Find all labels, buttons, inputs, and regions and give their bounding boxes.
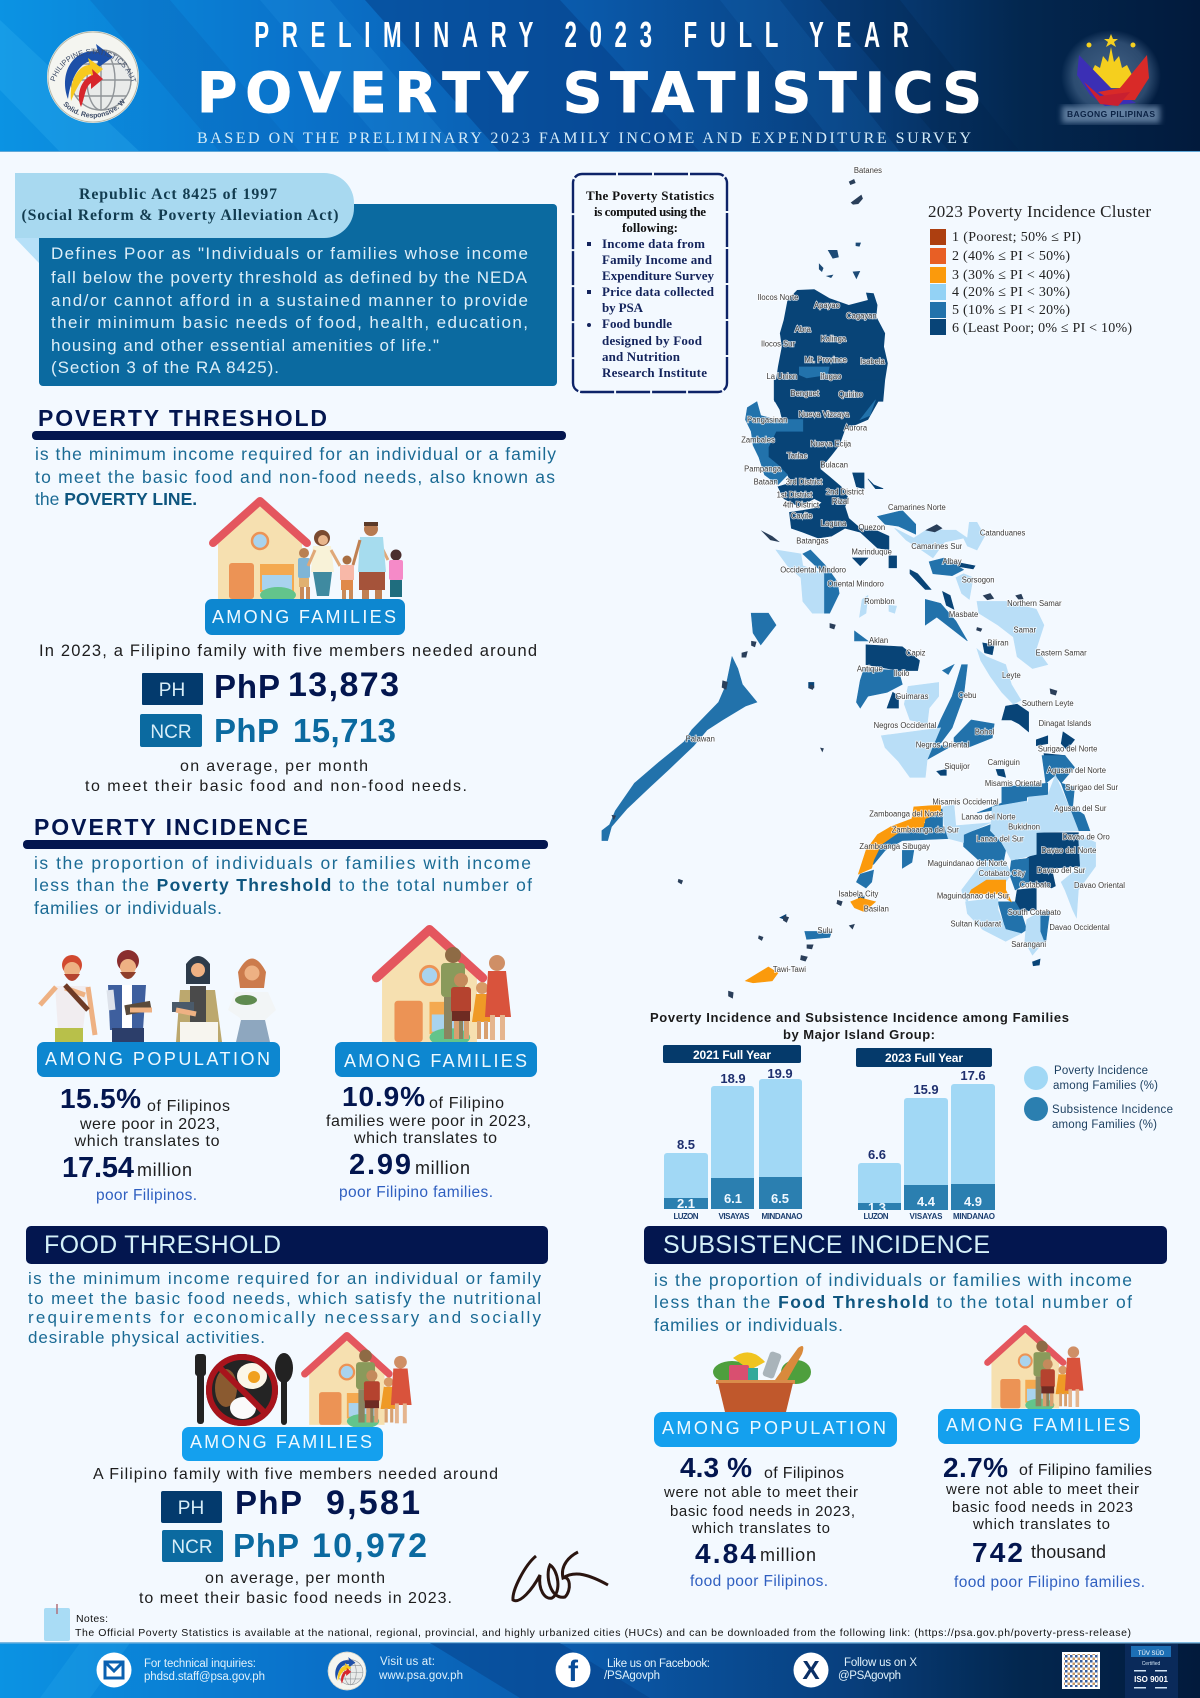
panel: poverty incidence: AMONG POPULATION bbox=[45, 1049, 270, 1069]
contact: facebook: /PSAgovph bbox=[604, 1670, 660, 1682]
chart: 2023 full year: 4.4 bbox=[917, 1194, 936, 1209]
icon: house and family bbox=[376, 930, 511, 1047]
province labels (lower): Ifugao bbox=[820, 372, 841, 381]
stat: families: families were poor in 2023, bbox=[326, 1113, 531, 1130]
chart: 2021 full year: MINDANAO bbox=[762, 1212, 802, 1221]
panel: subsistence incidence: AMONG POPULATION bbox=[662, 1418, 886, 1438]
province labels (lower): Maguindanao del Norte bbox=[928, 859, 1007, 868]
stat: families: million bbox=[415, 1158, 470, 1178]
stat: population: 15.5% bbox=[60, 1083, 141, 1114]
province labels (lower): Nueva Ecija bbox=[810, 439, 852, 448]
panel: subsistence incidence: SUBSISTENCE INCIDENCE bbox=[663, 1231, 990, 1259]
chart: 2021 full year: 18.9 bbox=[720, 1071, 746, 1086]
panel: poverty threshold: to meet their basic food and non-food needs. bbox=[85, 778, 467, 795]
province labels (lower): Batangas bbox=[796, 537, 829, 546]
province labels (lower): Kalinga bbox=[821, 335, 847, 344]
panel: data sources note: The Poverty Statistics bbox=[586, 188, 714, 203]
province labels (lower): Camarines Norte bbox=[888, 503, 946, 512]
stat: families: basic food needs in 2023 bbox=[952, 1499, 1133, 1516]
subtitle: BASED ON THE PRELIMINARY 2023 FAMILY INCOME AND EXPENDITURE SURVEY bbox=[197, 130, 971, 147]
figure: PH threshold bbox=[142, 666, 399, 705]
panel: Republic Act 8425: Republic Act 8425 of 1997 bbox=[79, 186, 277, 203]
panel: data sources note: Expenditure Survey bbox=[602, 268, 714, 283]
province labels (lower): Mt. Province bbox=[805, 355, 847, 365]
province labels (lower): Davao del Sur bbox=[1037, 866, 1086, 875]
chart: 2021 full year: VISAYAS bbox=[718, 1212, 750, 1221]
province labels (upper): Batanes bbox=[854, 166, 882, 175]
province labels (lower): Davao del Norte bbox=[1041, 846, 1096, 855]
province labels (lower): Misamis Occidental bbox=[932, 797, 999, 807]
stat: families bbox=[326, 1081, 531, 1201]
panel: data sources note: Family Income and bbox=[602, 252, 713, 267]
province labels (lower): Misamis Oriental bbox=[985, 779, 1042, 788]
logo: Bagong Pilipinas bbox=[1061, 30, 1161, 123]
figure: PH food threshold bbox=[161, 1484, 420, 1523]
province labels (lower): South Cotabato bbox=[1008, 908, 1061, 917]
definition: families or individuals. bbox=[654, 1315, 843, 1335]
province labels (lower): Aurora bbox=[844, 423, 868, 433]
panel: subsistence incidence bbox=[644, 1226, 1167, 1591]
figure: PH food threshold: PhP bbox=[235, 1484, 302, 1521]
chart: 2023 full year: LUZON bbox=[864, 1212, 889, 1221]
contact: facebook: Like us on Facebook: bbox=[607, 1658, 710, 1670]
province labels (lower): Apayao bbox=[814, 301, 840, 310]
province labels (lower): 3rd District bbox=[786, 478, 823, 487]
figure: NCR threshold: NCR bbox=[150, 722, 192, 743]
pill: among families bbox=[205, 599, 405, 635]
central and southern Philippines bbox=[602, 166, 1125, 999]
stat: families: of Filipino families bbox=[1019, 1462, 1152, 1479]
panel: food threshold: to meet their basic food needs in 2023. bbox=[139, 1590, 452, 1607]
legend: poverty incidence cluster: 4 (20% ≤ PI < 30%) bbox=[952, 285, 1070, 300]
province labels (lower): Capiz bbox=[906, 648, 926, 658]
contact: email: For technical inquiries: bbox=[144, 1658, 256, 1670]
stat: population: were poor in 2023, bbox=[79, 1116, 220, 1133]
stat: families: of Filipino bbox=[429, 1095, 504, 1112]
chart legend: Poverty Incidence bbox=[1054, 1065, 1148, 1077]
ISO badge: TÜV SÜD bbox=[1138, 1650, 1165, 1657]
heading bbox=[644, 1226, 1167, 1264]
legend: poverty incidence cluster: 5 (10% ≤ PI < 20%) bbox=[952, 303, 1070, 318]
figure: PH food threshold: 9,581 bbox=[326, 1484, 420, 1522]
province labels (lower): Siquijor bbox=[944, 762, 970, 771]
province labels (lower): Zamboanga del Sur bbox=[892, 826, 959, 835]
ISO badge: ISO 9001 bbox=[1134, 1675, 1168, 1684]
chart: 2021 full year: 2.1 bbox=[677, 1196, 695, 1211]
chart: 2021 full year: 6.5 bbox=[771, 1191, 789, 1206]
stat: population bbox=[60, 1083, 230, 1204]
contact: X bbox=[794, 1652, 917, 1688]
text: needed around: In 2023, a Filipino family with five members needed around bbox=[39, 642, 537, 660]
stat: population: food poor Filipinos. bbox=[690, 1573, 828, 1590]
province labels (lower): Bulacan bbox=[820, 461, 848, 470]
stat: population: which translates to bbox=[691, 1520, 830, 1537]
chart: poverty and subsistence incidence by major island group: by Major Island Group: bbox=[783, 1027, 935, 1042]
province labels (lower): Basilan bbox=[864, 904, 889, 913]
definition: less than the Poverty Threshold to the total number of bbox=[34, 875, 532, 895]
province labels (lower): Pangasinan bbox=[747, 415, 787, 424]
panel: data sources note: Price data collected bbox=[602, 284, 715, 299]
province labels (lower): Catanduanes bbox=[980, 529, 1025, 538]
contact: email bbox=[96, 1652, 265, 1688]
definition bbox=[654, 1270, 1132, 1335]
legend: poverty incidence cluster bbox=[928, 202, 1151, 336]
pill: among population bbox=[37, 1042, 280, 1077]
panel: subsistence incidence: AMONG FAMILIES bbox=[946, 1415, 1130, 1435]
panel: data sources note: by PSA bbox=[602, 300, 644, 315]
province labels (lower): Ilocos Sur bbox=[761, 339, 795, 348]
province labels (lower): Zamboanga del Norte bbox=[869, 809, 943, 818]
province labels (lower): Laguna bbox=[821, 519, 847, 528]
contact: website: Visit us at: bbox=[380, 1656, 435, 1668]
stat: population: million bbox=[137, 1160, 192, 1180]
province labels (lower): Benguet bbox=[791, 389, 820, 398]
legend: poverty incidence cluster: 6 (Least Poor; 0% ≤ PI < 10%) bbox=[952, 321, 1132, 336]
province labels (lower): Southern Leyte bbox=[1022, 699, 1074, 708]
definition: requirements for economically necessary and socially bbox=[28, 1308, 541, 1327]
province labels (lower): Sultan Kudarat bbox=[951, 919, 1002, 928]
definition: less than the Food Threshold to the total number of bbox=[654, 1292, 1132, 1312]
province labels (lower): Isabela City bbox=[838, 890, 878, 899]
text: needed around: A Filipino family with five members needed around bbox=[93, 1466, 498, 1483]
definition text: (Section 3 of the RA 8425). bbox=[51, 358, 279, 377]
province labels (lower): Davao de Oro bbox=[1062, 832, 1110, 841]
province labels (lower): Negros Occidental bbox=[874, 721, 937, 730]
province labels (lower): Lanao del Sur bbox=[976, 834, 1024, 843]
province labels (lower): Davao Oriental bbox=[1074, 881, 1125, 890]
heading: POVERTY INCIDENCE bbox=[34, 814, 308, 840]
province labels (lower): Bohol bbox=[975, 727, 995, 737]
province labels (lower): Bukidnon bbox=[1008, 822, 1040, 831]
province labels (lower): Palawan bbox=[686, 735, 715, 744]
definition text: and/or cannot afford in a sustained manner to provide bbox=[51, 291, 528, 310]
chart: 2023 full year: 17.6 bbox=[960, 1068, 986, 1083]
fold triangle bbox=[15, 238, 39, 263]
definition text: housing and other essential amenities of life." bbox=[51, 336, 439, 355]
province labels (lower): Antique bbox=[857, 664, 883, 673]
definition: is the proportion of individuals or families with income bbox=[654, 1270, 1132, 1290]
stat: population: were not able to meet their bbox=[663, 1484, 858, 1501]
province labels (lower): Aklan bbox=[869, 636, 888, 645]
province labels (lower): Abra bbox=[795, 325, 812, 334]
panel: Republic Act 8425: (Social Reform & Poverty Alleviation Act) bbox=[22, 207, 338, 224]
province labels (lower): Sarangani bbox=[1011, 940, 1046, 949]
text: per month: on average, per month bbox=[180, 758, 368, 775]
province labels (lower): Guimaras bbox=[895, 692, 929, 701]
province labels (lower): 1st District bbox=[777, 490, 813, 499]
stat: families: 10.9% bbox=[342, 1081, 425, 1112]
contact: facebook bbox=[556, 1652, 710, 1688]
province labels (lower): Cotabato City bbox=[979, 869, 1025, 878]
province labels (lower): Cagayan bbox=[846, 312, 877, 321]
province labels (lower): Leyte bbox=[1002, 671, 1021, 680]
province labels (lower): Agusan del Norte bbox=[1047, 766, 1106, 775]
stat: families: 742 bbox=[972, 1537, 1023, 1568]
chart: 2023 full year: 2023 Full Year bbox=[885, 1051, 963, 1065]
chart: 2023 full year: 6.6 bbox=[868, 1147, 886, 1162]
province labels (lower): Bataan bbox=[754, 477, 778, 486]
province labels (lower): Sulu bbox=[817, 926, 833, 935]
icon: note bbox=[44, 1604, 70, 1641]
stat: families: were not able to meet their bbox=[945, 1481, 1139, 1498]
ISO badge: Certified bbox=[1142, 1661, 1161, 1667]
logo: PSA bbox=[47, 31, 139, 123]
ISO badge bbox=[1125, 1644, 1178, 1698]
pill: among population bbox=[654, 1412, 897, 1447]
contact: X: X bbox=[802, 1655, 820, 1685]
figure: NCR food threshold: PhP bbox=[233, 1527, 299, 1564]
signature bbox=[513, 1552, 608, 1601]
contact: email: phdsd.staff@psa.gov.ph bbox=[144, 1671, 265, 1683]
figure: NCR threshold bbox=[140, 712, 396, 749]
footer banner bbox=[0, 1642, 1200, 1698]
chart: 2023 full year bbox=[856, 1048, 995, 1221]
figure: PH threshold: PhP bbox=[214, 668, 280, 705]
province labels (lower): Rizal bbox=[832, 497, 849, 506]
contact: X: Follow us on X bbox=[844, 1657, 917, 1669]
panel: data sources note: and Nutrition bbox=[602, 349, 681, 364]
province labels (lower): Masbate bbox=[949, 610, 978, 619]
chart legend: Subsistence Incidence bbox=[1052, 1104, 1173, 1116]
logo: PSA: Solid. Responsive. World-class bbox=[64, 98, 125, 120]
contact: website: www.psa.gov.ph bbox=[378, 1670, 463, 1682]
province labels (lower): Camarines Sur bbox=[911, 542, 963, 551]
panel: data sources note: Income data from bbox=[602, 236, 705, 251]
province labels (lower): Isabela bbox=[860, 357, 885, 366]
figure: NCR threshold: PhP bbox=[214, 712, 279, 749]
province labels (lower): Albay bbox=[943, 557, 962, 566]
figure: NCR food threshold bbox=[162, 1527, 427, 1565]
panel: poverty incidence: AMONG FAMILIES bbox=[344, 1051, 527, 1071]
panel: data sources note bbox=[573, 174, 727, 392]
chart: 2021 full year bbox=[663, 1045, 802, 1221]
stat: population: of Filipinos bbox=[147, 1098, 230, 1115]
chart: 2023 full year: MINDANAO bbox=[953, 1212, 995, 1221]
icon: four people eating bbox=[40, 950, 276, 1042]
legend: poverty incidence cluster: 3 (30% ≤ PI < 40%) bbox=[952, 268, 1070, 283]
province labels (lower): La Union bbox=[766, 372, 797, 381]
legend: poverty incidence cluster: 2023 Poverty Incidence Cluster bbox=[928, 202, 1151, 221]
stat: population: 4.84 bbox=[695, 1538, 756, 1569]
title: line 1: PRELIMINARY 2023 FULL YEAR bbox=[254, 16, 909, 55]
pill: among families bbox=[938, 1409, 1140, 1444]
contact: facebook: f bbox=[568, 1655, 579, 1688]
province labels (lower): Cebu bbox=[958, 691, 977, 700]
province labels (lower): Camiguin bbox=[988, 758, 1020, 767]
province labels (lower): Occidental Mindoro bbox=[780, 565, 846, 575]
chart: poverty and subsistence incidence by major island group bbox=[650, 1010, 1173, 1221]
province labels (lower): Maguindanao del Sur bbox=[937, 892, 1010, 901]
chart: 2021 full year: 2021 Full Year bbox=[693, 1048, 771, 1062]
panel: data sources note: is computed using the bbox=[594, 204, 706, 219]
figure: PH threshold: 13,873 bbox=[288, 666, 399, 704]
stat: population: of Filipinos bbox=[764, 1465, 844, 1482]
stat: population: million bbox=[760, 1545, 816, 1565]
province labels (lower): Cotabato bbox=[1020, 880, 1051, 890]
province labels (lower): Zamboanga Sibugay bbox=[859, 842, 930, 851]
panel: data sources note: designed by Food bbox=[602, 333, 703, 348]
province labels (lower): Ilocos Norte bbox=[758, 293, 798, 302]
province labels (lower): Iloilo bbox=[894, 669, 909, 678]
northern Luzon and Batanes bbox=[774, 179, 888, 402]
chart: 2023 full year: VISAYAS bbox=[910, 1212, 943, 1221]
chart: 2021 full year: LUZON bbox=[674, 1212, 699, 1221]
panel: poverty threshold: AMONG FAMILIES bbox=[212, 607, 396, 627]
province labels (lower): Lanao del Norte bbox=[961, 812, 1016, 822]
province labels (lower): Tarlac bbox=[787, 451, 807, 460]
chart title: Poverty Incidence and Subsistence Incidence among Families bbox=[650, 1010, 1069, 1025]
province labels (lower): Agusan del Sur bbox=[1054, 804, 1107, 813]
definition text bbox=[51, 244, 528, 377]
notes: The Official Poverty Statistics is available at the national, regional, provincial, and highly urbanized cities (HUCs) and can be downloaded from the following link: (https://psa.gov.ph/poverty-press-release) bbox=[75, 1627, 1131, 1639]
chart legend: among Families (%) bbox=[1052, 1119, 1157, 1131]
pill: among families bbox=[335, 1042, 537, 1077]
definition: the POVERTY LINE. bbox=[35, 489, 197, 509]
definition text: fall below the poverty threshold as defined by the NEDA bbox=[51, 268, 528, 287]
contact: website bbox=[328, 1652, 463, 1690]
stat: population: 4.3 % bbox=[680, 1452, 752, 1483]
province labels (lower): Surigao del Norte bbox=[1038, 744, 1097, 754]
figure: NCR food threshold: NCR bbox=[171, 1537, 213, 1558]
panel: food threshold: AMONG FAMILIES bbox=[190, 1432, 372, 1452]
stat: families: 2.99 bbox=[349, 1149, 411, 1181]
heading: POVERTY THRESHOLD bbox=[38, 405, 327, 431]
panel: poverty incidence bbox=[23, 814, 548, 1204]
chart: 2023 full year: 4.9 bbox=[964, 1194, 982, 1209]
chart: 2021 full year: 19.9 bbox=[767, 1066, 793, 1081]
panel: data sources note: following: bbox=[622, 220, 678, 235]
panel: poverty threshold bbox=[32, 405, 566, 795]
panel: food threshold bbox=[26, 1226, 548, 1607]
legend: poverty incidence cluster: 2 (40% ≤ PI < 50%) bbox=[952, 249, 1070, 264]
province labels (lower): Biliran bbox=[987, 639, 1009, 648]
chart legend: among Families (%) bbox=[1053, 1080, 1158, 1092]
figure: PH food threshold: PH bbox=[178, 1498, 204, 1519]
figure: NCR threshold: 15,713 bbox=[293, 712, 396, 749]
icon: house and family bbox=[305, 1336, 412, 1429]
definition: desirable physical activities. bbox=[28, 1328, 265, 1347]
definition: is the proportion of individuals or families with income bbox=[34, 853, 531, 873]
panel: data sources note: Research Institute bbox=[602, 365, 707, 380]
province labels (lower): Dinagat Islands bbox=[1039, 719, 1091, 728]
province labels (lower): 4th District bbox=[783, 500, 820, 509]
province labels (lower): Davao Occidental bbox=[1049, 923, 1110, 932]
definition bbox=[34, 853, 532, 918]
icon: house and family bbox=[987, 1328, 1083, 1412]
icon: no food plate bbox=[195, 1353, 293, 1426]
definition text: their minimum basic needs of food, health, education, bbox=[51, 313, 528, 332]
province labels (lower): Quezon bbox=[858, 523, 885, 532]
title: line 2: POVERTY STATISTICS bbox=[197, 61, 982, 125]
province labels (lower): Quirino bbox=[838, 390, 863, 399]
stat: families bbox=[943, 1452, 1152, 1591]
icon: house and family bbox=[213, 501, 403, 603]
text: per month: on average, per month bbox=[205, 1570, 385, 1587]
province labels (lower): Zambales bbox=[741, 435, 775, 444]
figure: PH threshold: PH bbox=[159, 680, 185, 701]
contact: X: @PSAgovph bbox=[838, 1670, 901, 1682]
panel: data sources note: Food bundle bbox=[602, 316, 672, 331]
header banner bbox=[0, 0, 1200, 152]
province labels (lower): Eastern Samar bbox=[1036, 648, 1087, 658]
stat: population bbox=[663, 1452, 858, 1590]
province labels (lower): 2nd District bbox=[826, 488, 865, 497]
definition box bbox=[39, 204, 557, 386]
tab bbox=[15, 173, 354, 238]
definition: is the minimum income required for an individual or family bbox=[28, 1269, 542, 1288]
province labels (lower): Negros Oriental bbox=[916, 741, 970, 750]
province labels (lower): Samar bbox=[1014, 625, 1036, 635]
definition text: Defines Poor as "Individuals or families whose income bbox=[51, 244, 528, 263]
figure: NCR food threshold: 10,972 bbox=[312, 1527, 427, 1565]
stat: families: which translates to bbox=[972, 1516, 1110, 1533]
province labels (lower): Oriental Mindoro bbox=[827, 579, 884, 588]
stat: population: poor Filipinos. bbox=[96, 1187, 197, 1204]
province labels (lower): Marinduque bbox=[852, 548, 892, 557]
definition bbox=[28, 1269, 542, 1347]
stat: families: 2.7% bbox=[943, 1452, 1008, 1483]
stat: families: food poor Filipino families. bbox=[954, 1574, 1145, 1591]
province labels (lower): Tawi-Tawi bbox=[773, 965, 806, 974]
logo: PSA: PHILIPPINE STATISTICS AUTHORITY bbox=[50, 48, 136, 82]
panel: food threshold: FOOD THRESHOLD bbox=[44, 1231, 281, 1259]
definition: to meet the basic food and non-food needs, also known as bbox=[35, 467, 555, 487]
definition: is the minimum income required for an individual or a family bbox=[35, 444, 556, 464]
map: Philippines poverty incidence bbox=[602, 166, 1125, 999]
legend: poverty incidence cluster: 1 (Poorest; 50% ≤ PI) bbox=[952, 230, 1081, 245]
chart: 2021 full year: 8.5 bbox=[677, 1137, 695, 1152]
notes bbox=[44, 1604, 1131, 1641]
stat: families: thousand bbox=[1031, 1542, 1106, 1562]
chart: 2021 full year: 6.1 bbox=[724, 1191, 742, 1206]
province labels (lower): Pampanga bbox=[744, 465, 782, 474]
icon: food basket bbox=[713, 1346, 811, 1412]
stat: population: basic food needs in 2023, bbox=[670, 1503, 855, 1520]
stat: population: which translates to bbox=[74, 1133, 220, 1150]
province labels (lower): Cavite bbox=[791, 512, 813, 521]
province labels (lower): Northern Samar bbox=[1007, 599, 1062, 608]
chart: 2023 full year: 15.9 bbox=[913, 1082, 939, 1097]
panel: Republic Act 8425 bbox=[15, 173, 557, 386]
pill: among families bbox=[182, 1427, 383, 1461]
province labels (lower): Sorsogon bbox=[962, 575, 994, 584]
definition: families or individuals. bbox=[34, 898, 222, 918]
QR code bbox=[1062, 1652, 1100, 1689]
stat: families: poor Filipino families. bbox=[339, 1184, 493, 1201]
stat: families: which translates to bbox=[353, 1130, 497, 1147]
chart: 2023 full year: 1.3 bbox=[868, 1200, 886, 1215]
stat: population: 17.54 bbox=[62, 1152, 134, 1184]
definition: to meet the basic food needs, which satisfy the nutritional bbox=[28, 1289, 541, 1308]
logo: Bagong Pilipinas: BAGONG PILIPINAS bbox=[1067, 109, 1155, 119]
province labels (lower): Nueva Vizcaya bbox=[798, 410, 850, 419]
heading bbox=[26, 1226, 548, 1264]
notes: Notes: bbox=[76, 1613, 108, 1625]
province labels (lower): Surigao del Sur bbox=[1065, 783, 1119, 792]
province labels (lower) bbox=[686, 166, 1125, 974]
definition bbox=[35, 444, 556, 509]
province labels (lower): Romblon bbox=[864, 597, 895, 606]
chart legend bbox=[1024, 1065, 1173, 1131]
